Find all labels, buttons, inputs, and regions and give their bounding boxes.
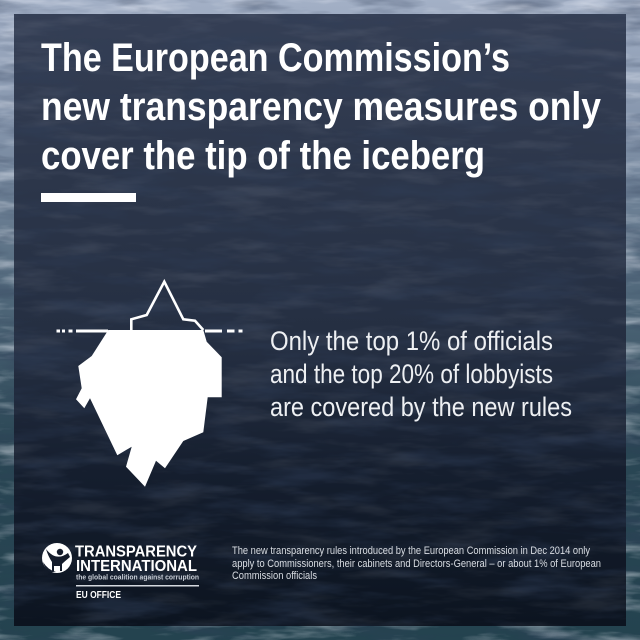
logo: Transparency International EU Office: TRANSPARENCY [75, 544, 198, 560]
iceberg submerged mass [76, 330, 222, 487]
title: cover the tip of the iceberg [41, 134, 485, 178]
title underline bar [41, 193, 136, 202]
logo: Transparency International EU Office: INTERNATIONAL [76, 558, 197, 575]
logo: Transparency International EU Office [42, 543, 199, 601]
text block: footnote [232, 545, 601, 582]
iceberg tip outline [131, 282, 203, 331]
text block: key message [270, 326, 572, 422]
title: The European Commission’s [41, 36, 510, 80]
waterline [56, 330, 242, 332]
text block: key message: are covered by the new rules [270, 392, 572, 422]
logo: Transparency International EU Office: the global coalition against corruption [76, 574, 199, 582]
icon: iceberg [56, 282, 242, 487]
text block: key message: Only the top 1% of officials [270, 326, 553, 356]
text block: key message: and the top 20% of lobbyists [270, 359, 553, 389]
icon: logo globe [42, 543, 72, 573]
title [41, 36, 602, 178]
text block: footnote: Commission officials [232, 570, 317, 582]
logo: Transparency International EU Office: EU OFFICE [76, 590, 121, 601]
